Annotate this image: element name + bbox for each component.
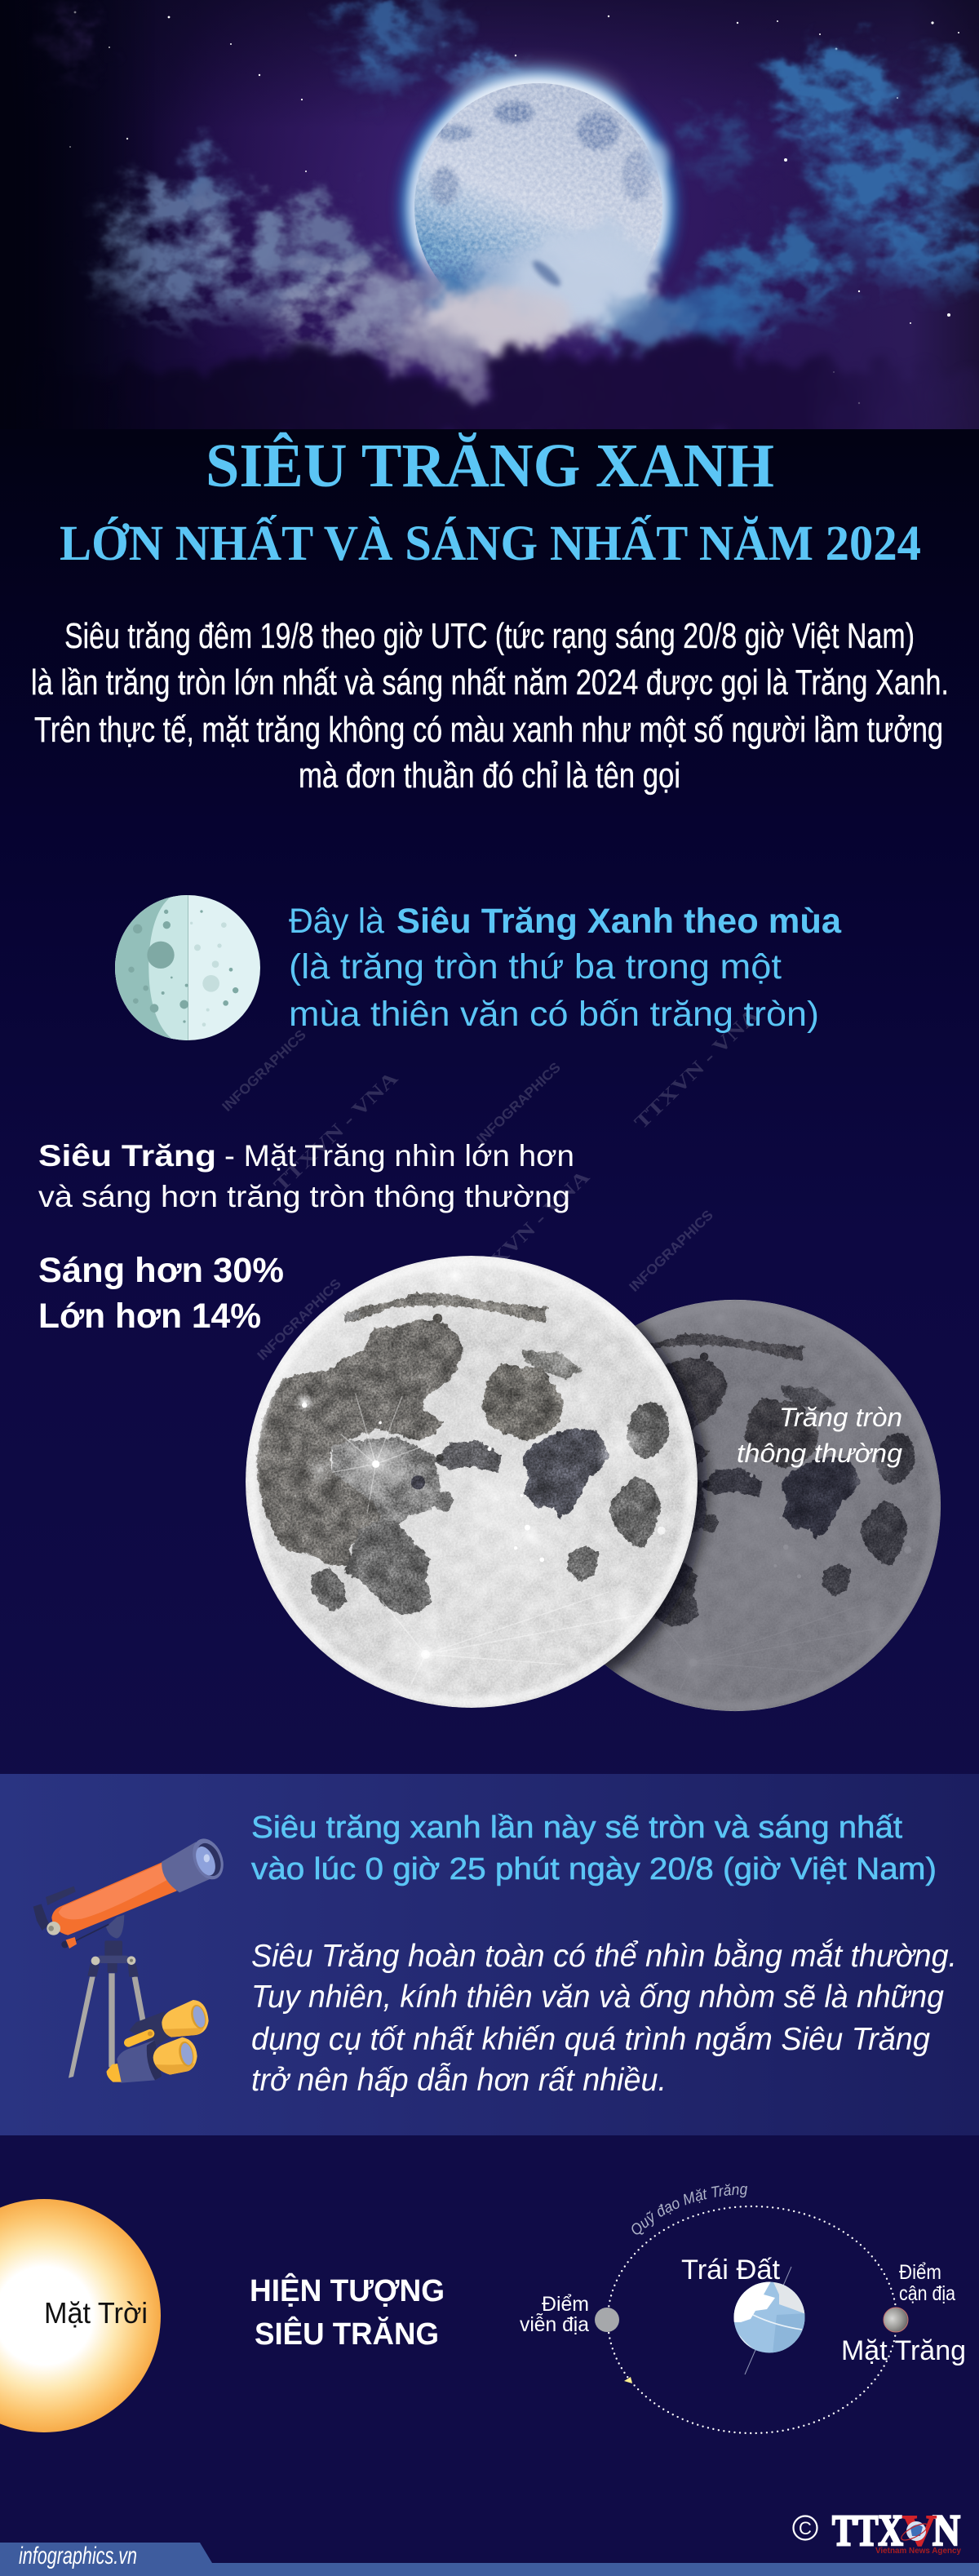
callout: seasonal blue supermoon: Đây là [289, 902, 384, 941]
clouds left / right / top [49, 0, 979, 363]
icon: stylised blue moon [114, 893, 260, 1042]
watermarks: TTXVN - VNA [631, 1004, 764, 1133]
logo: TTXVN: V [902, 2506, 937, 2555]
label: apogee: Điểm [542, 2293, 589, 2316]
logo: TTXVN: TTX [832, 2506, 903, 2555]
callout: seasonal blue supermoon: Siêu Trăng Xanh theo mùa [396, 902, 842, 941]
logo: TTXVN [793, 2506, 961, 2556]
callout: seasonal blue supermoon: (là trăng tròn thứ ba trong một [289, 947, 782, 987]
watermarks: INFOGRAPHICS [627, 1207, 716, 1295]
supermoon statistics: Sáng hơn 30% [38, 1251, 284, 1290]
icon: earth [733, 2281, 808, 2353]
supermoon definition: Siêu Trăng [38, 1139, 216, 1173]
panel: viewing time band [0, 1774, 979, 2135]
label: moon: Mặt Trăng [841, 2335, 966, 2366]
icon: sun: Mặt Trời [44, 2296, 148, 2330]
orbit label [636, 2194, 751, 2237]
watermarks: INFOGRAPHICS [474, 1059, 564, 1147]
logo: TTXVN: Vietnam News Agency [875, 2546, 961, 2556]
callout: seasonal blue supermoon: mùa thiên văn có bốn trăng tròn) [289, 995, 819, 1034]
supermoon statistics: Lớn hơn 14% [38, 1297, 261, 1336]
watermarks [219, 1004, 764, 1363]
title: LỚN NHẤT VÀ SÁNG NHẤT NĂM 2024 [60, 515, 921, 571]
intro paragraph [31, 616, 949, 796]
label: perigee: cận địa [899, 2282, 955, 2305]
callout: seasonal blue supermoon [289, 902, 842, 1034]
text: viewing advice: Siêu Trăng hoàn toàn có thể nhìn bằng mắt thường. [251, 1939, 957, 1974]
moon disc [414, 83, 662, 286]
orbit direction arrow [624, 2377, 632, 2383]
moon glow [400, 69, 677, 346]
logo: TTXVN: N [932, 2506, 960, 2555]
earth axis [745, 2267, 791, 2374]
icon: sun [0, 2199, 161, 2432]
footer bar [0, 2543, 979, 2576]
supermoon statistics [38, 1251, 284, 1336]
label: perigee [899, 2261, 955, 2305]
label: apogee: viễn địa [520, 2312, 589, 2336]
label: earth: Trái Đất [681, 2255, 781, 2286]
footer bar: infographics.vn [19, 2543, 137, 2569]
heading: peak time: Siêu trăng xanh lần này sẽ tròn và sáng nhất [251, 1811, 902, 1845]
label: perigee: Điểm [899, 2261, 941, 2284]
watermarks: TTXVN - VNA [462, 1166, 595, 1295]
perigee moon [884, 2308, 908, 2332]
orbit path [608, 2206, 897, 2433]
text: viewing advice [251, 1939, 957, 2098]
intro paragraph: mà đơn thuần đó chỉ là tên gọi [299, 756, 680, 796]
label: ordinary full moon: thông thường [737, 1439, 902, 1468]
label: ordinary full moon [737, 1403, 902, 1468]
dark lower clouds [111, 329, 979, 429]
bright cloud over moon [347, 224, 763, 410]
supermoon definition [38, 1139, 574, 1213]
super moon [246, 1248, 698, 1708]
text: viewing advice: trở nên hấp dẫn hơn rất nhiều. [251, 2063, 667, 2098]
watermarks: INFOGRAPHICS [219, 1026, 309, 1115]
title: SIÊU TRĂNG XANH [206, 432, 774, 500]
apogee moon [595, 2308, 619, 2332]
text: viewing advice: dụng cụ tốt nhất khiến quá trình ngắm Siêu Trăng [251, 2022, 930, 2057]
heading: supermoon phenomenon [250, 2272, 445, 2352]
heading: peak time [251, 1811, 937, 1887]
supermoon definition: và sáng hơn trăng tròn thông thường [38, 1180, 570, 1213]
title [60, 432, 921, 571]
supermoon definition: - Mặt Trăng nhìn lớn hơn [224, 1139, 574, 1173]
logo: TTXVN: C [799, 2518, 812, 2538]
diagram: moon orbit: Quỹ đạo Mặt Trăng [631, 2184, 747, 2235]
ordinary full moon [605, 1299, 941, 1712]
label: apogee [520, 2293, 589, 2336]
heading: supermoon phenomenon: SIÊU TRĂNG [255, 2316, 439, 2352]
heading: peak time: vào lúc 0 giờ 25 phút ngày 20/8 (giờ Việt Nam) [251, 1852, 937, 1887]
hero photo: night sky with blue moon and clouds [0, 0, 979, 441]
diagram: moon orbit [520, 2184, 966, 2435]
watermarks: INFOGRAPHICS [255, 1275, 344, 1363]
label: ordinary full moon: Trăng tròn [779, 1403, 902, 1432]
watermarks: TTXVN - VNA [270, 1067, 403, 1196]
text: viewing advice: Tuy nhiên, kính thiên văn và ống nhòm sẽ là những [251, 1980, 944, 2015]
icon: telescope and binoculars [33, 1834, 229, 2083]
heading: supermoon phenomenon: HIỆN TƯỢNG [250, 2272, 445, 2308]
